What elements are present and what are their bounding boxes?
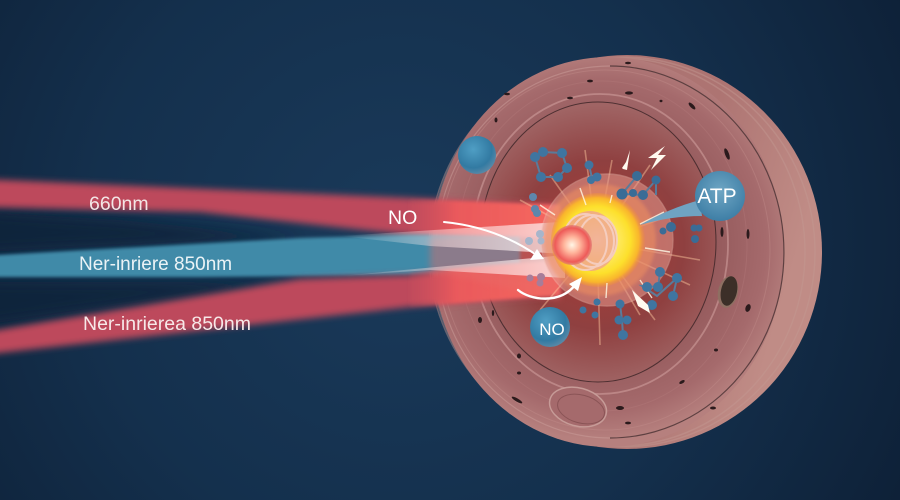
beam glow over cell <box>340 199 565 307</box>
dark wedges between beams <box>0 212 300 325</box>
energy core <box>520 150 700 345</box>
label: 660nm: 660nm <box>89 193 149 215</box>
wall pores <box>478 62 752 424</box>
sparkle rays <box>540 188 670 298</box>
label: blue beam: Ner-inriere 850nm <box>79 254 232 275</box>
molecule: left middle pale <box>525 230 544 245</box>
side rim bands <box>429 57 815 447</box>
yellow glow <box>551 193 645 287</box>
ATP callout <box>640 171 745 225</box>
curved arrows <box>444 222 582 299</box>
label: lower beam: Ner-inrierea 850nm <box>83 313 251 335</box>
molecule: lower right cluster <box>642 267 682 310</box>
vessel oval <box>545 381 611 433</box>
bolt lower <box>632 290 650 313</box>
molecule: left lower pale <box>526 273 545 286</box>
molecule: top right cluster <box>616 171 660 200</box>
molecule: lower centre <box>614 300 632 340</box>
outer side rim <box>432 55 822 449</box>
beam: 660nm red <box>0 179 560 240</box>
label: NO: NO <box>388 207 417 229</box>
molecule: left upper <box>529 193 541 217</box>
bolt large <box>648 146 666 170</box>
molecule: top left ring <box>530 147 572 182</box>
nucleus <box>552 225 592 265</box>
wall rings <box>436 66 784 438</box>
beam: blue near-infrared <box>0 235 520 277</box>
striped rings <box>563 211 617 271</box>
cell cross-section <box>429 55 822 449</box>
molecule: top centre <box>584 160 602 184</box>
front face wall <box>432 57 784 447</box>
dark hole <box>715 274 741 310</box>
molecule: right <box>660 222 676 234</box>
molecule: lower left <box>580 298 600 318</box>
NO bubble <box>530 307 570 347</box>
molecules <box>525 147 702 340</box>
blue sphere <box>458 136 496 174</box>
outer sphere <box>541 174 673 306</box>
lightning bolts <box>622 146 666 313</box>
NO bubble: NO <box>539 320 565 339</box>
rays <box>520 150 700 345</box>
bolt small <box>622 150 630 170</box>
lumen <box>480 102 716 382</box>
ATP callout: ATP <box>697 185 737 208</box>
arrow: lower curve <box>518 277 582 299</box>
beam: lower red <box>0 262 560 355</box>
arrow: NO to nucleus <box>444 222 544 260</box>
molecule: far right <box>690 224 702 243</box>
